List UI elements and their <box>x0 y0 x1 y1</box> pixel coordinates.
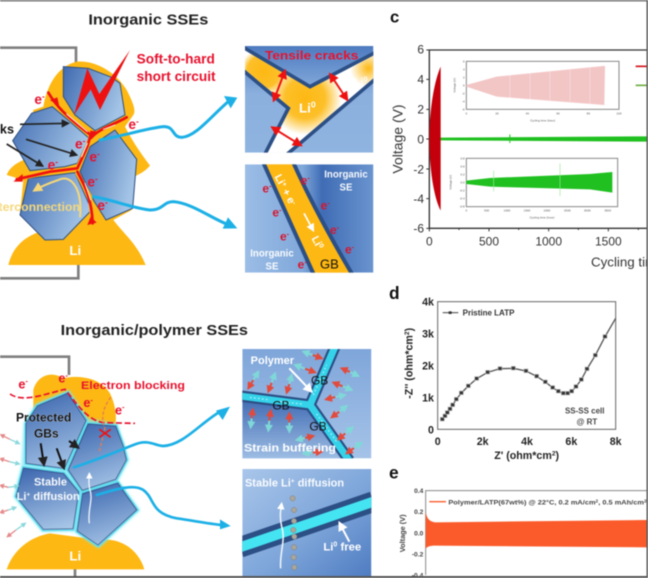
electrons: e <box>262 181 269 195</box>
reaction label: - <box>290 201 297 206</box>
y axis title: 2 <box>404 331 411 335</box>
label: soft-to-hard short circuit: short circuit <box>137 69 216 84</box>
right frame strip <box>646 0 648 578</box>
inset: green trace: 0 <box>465 209 467 213</box>
Li ion dots <box>290 496 297 570</box>
reaction label: + e <box>278 184 297 206</box>
legend: Pristine LATP <box>463 308 515 317</box>
heading: Inorganic/polymer SSEs: Inorganic/polymer SSEs <box>61 323 248 339</box>
inset: red trace: 6 <box>463 59 465 63</box>
inset: green trace: 0.2 <box>461 172 465 176</box>
GB labels <box>272 374 328 434</box>
strain arrows <box>248 355 354 453</box>
inset: green trace: 2500 <box>564 209 571 213</box>
electron labels: e <box>34 92 42 107</box>
electrons: - <box>304 257 307 266</box>
interconnection arrow <box>34 179 80 217</box>
y axis title: ) <box>404 327 416 331</box>
inset: green trace: 3000 <box>584 209 591 213</box>
tensile double arrows <box>272 71 347 145</box>
label: soft-to-hard short circuit: Soft-to-hard <box>137 51 215 66</box>
electron labels: - <box>83 135 86 145</box>
electrons: - <box>122 403 125 412</box>
x tick labels: 0 <box>426 234 433 248</box>
reaction label: + <box>280 181 288 188</box>
Li0 free pointer <box>339 523 349 542</box>
electron labels: - <box>42 91 45 101</box>
x tick labels: 1500 <box>595 234 622 248</box>
axes frame <box>426 491 648 575</box>
y tick labels: -0.2 <box>412 552 424 559</box>
y tick labels: 4 <box>417 73 424 87</box>
label: Li0 product: 0 <box>317 243 325 250</box>
x tick labels: 4k <box>521 436 533 448</box>
electrons <box>18 371 125 417</box>
y axis title: -Z'' (ohm*cm <box>404 335 416 399</box>
inset: green trace: -0.2 <box>460 188 465 192</box>
inset: red trace: -6 <box>462 107 465 111</box>
inset: green trace: 1000 <box>504 209 511 213</box>
inset: green trace: -0.4 <box>460 196 465 200</box>
inset: red trace: 100 <box>617 112 622 116</box>
label: Stable Li+ diffusion: Li <box>17 491 26 503</box>
inset: red trace <box>453 59 622 123</box>
bottom frame strip <box>0 576 648 578</box>
zoom panel: stable Li+ diffusion <box>240 469 373 576</box>
label: Li: Li <box>69 549 81 564</box>
electrons: e <box>321 198 327 212</box>
electrons: e <box>83 396 90 410</box>
electrons: e <box>58 372 65 386</box>
inset: red trace: 0 <box>463 83 465 87</box>
annotation: SS-SS cell @ RT: SS-SS cell <box>565 406 604 415</box>
x tick labels: 1000 <box>535 234 562 248</box>
protected grains <box>15 392 138 547</box>
ceramic grains <box>13 67 137 240</box>
y tick labels: 1k <box>422 392 434 404</box>
label: Stable Li+ diffusion: diffusion <box>30 491 80 503</box>
electron labels: e <box>89 150 97 165</box>
electrons: - <box>279 206 282 215</box>
electron labels: e <box>75 136 83 151</box>
electron labels: - <box>55 156 58 166</box>
cracks with electron paths <box>17 93 127 223</box>
inset: green trace: Voltage (V) <box>449 175 453 190</box>
electrons: - <box>25 377 28 386</box>
x tick labels: 6k <box>565 436 577 448</box>
blue zoom arrow upper <box>74 412 220 467</box>
x tick labels: 8k <box>610 436 622 448</box>
black arrows to cracks <box>7 123 77 166</box>
upper arrowhead <box>224 96 237 108</box>
y tick labels: 0 <box>417 132 424 146</box>
zoom panel: GB electron conduction <box>245 163 373 275</box>
inset: green trace: 3500 <box>604 209 611 213</box>
upper arrowhead <box>216 407 230 420</box>
legend: 2 <box>596 498 599 503</box>
chart e: polymer/LATP voltage profile <box>389 462 648 578</box>
y tick labels <box>422 296 434 436</box>
y axis title: Voltage (V) <box>398 514 407 552</box>
inset: red trace: 20 <box>495 112 499 116</box>
green trace <box>440 134 648 143</box>
inset: red trace: 4 <box>463 67 465 71</box>
electron labels: - <box>105 197 108 207</box>
label: Inorganic SE left: Inorganic <box>250 249 294 260</box>
legend <box>429 498 647 507</box>
red trace <box>429 67 441 211</box>
label: GB: GB <box>320 257 339 272</box>
heading: Inorganic SSEs: Inorganic SSEs <box>88 12 208 28</box>
inset: red trace: -2 <box>462 91 465 95</box>
label: Stable Li+ diffusion: + <box>291 478 295 485</box>
inset: green trace: 0.0 <box>461 180 465 184</box>
label: Inorganic SE right: SE <box>340 182 353 193</box>
electron labels: - <box>136 116 139 126</box>
inset: red trace: -4 <box>462 99 465 103</box>
x tick labels <box>426 234 622 248</box>
label: Inorganic SE right: Inorganic <box>324 170 368 181</box>
legend: Polymer/LATP(67wt%) @ 22°C, 0.2 mA/cm <box>448 500 581 507</box>
chart d: Nyquist impedance plot <box>389 283 622 462</box>
electron labels: e <box>97 198 105 213</box>
orange voltage band <box>426 512 648 549</box>
black arrows to GBs <box>41 441 78 468</box>
x tick labels: 500 <box>479 234 499 248</box>
electrons: e <box>280 230 287 244</box>
label: Protected GBs: GBs <box>34 427 59 441</box>
label: Li0 right: Li <box>354 77 363 89</box>
y tick labels: 3k <box>422 328 434 340</box>
panel letter d: d <box>389 283 400 303</box>
y tick labels: -6 <box>413 222 424 236</box>
electrons: - <box>352 242 355 251</box>
inset: red trace: 80 <box>587 112 590 116</box>
label: Stable Li+ diffusion: diffusion <box>295 478 344 490</box>
blue zoom arrow upper <box>100 99 232 140</box>
x axis title: Z' (ohm*cm <box>494 450 552 462</box>
circuit wire <box>0 48 78 278</box>
electrons: - <box>65 371 68 380</box>
inset: green trace: 0.8 <box>461 156 465 160</box>
panel: inorganic SSEs schematic <box>0 12 237 278</box>
inset: red trace: Voltage (V) <box>453 78 457 93</box>
polymer glow around grains <box>15 392 138 547</box>
inset: green trace: -0.8 <box>460 204 465 208</box>
inset: green trace: 2000 <box>544 209 551 213</box>
top frame line <box>0 0 648 2</box>
label: Li0 product: Li <box>309 234 324 248</box>
inset: green trace: 1500 <box>524 209 531 213</box>
inset: green trace: Cycling time (hour) <box>529 216 555 220</box>
electrons: e <box>301 174 307 188</box>
panel: inorganic/polymer SSEs schematic <box>0 323 248 578</box>
inset: red trace: Cycling time (hour) <box>530 119 555 123</box>
polymer pointer arrow <box>289 368 312 392</box>
panel letter e: e <box>389 462 399 482</box>
label: Li0 centre: 0 <box>311 100 316 110</box>
strain arrows left <box>0 435 25 537</box>
electron labels <box>34 91 139 213</box>
y tick labels: 6 <box>417 43 424 57</box>
electrons: e <box>330 223 337 237</box>
label: Stable Li+ diffusion: + <box>26 491 30 498</box>
crack arrowheads <box>13 97 99 225</box>
lithium dendrite blob <box>7 62 150 265</box>
y tick labels: 0 <box>428 424 434 436</box>
lower arrowhead <box>220 519 231 529</box>
electrons: - <box>327 198 330 207</box>
inset: green trace: 0.6 <box>461 164 465 168</box>
x tick labels: 2k <box>477 436 489 448</box>
inset: red trace: 2 <box>463 75 465 79</box>
GB labels: GB <box>311 374 328 388</box>
lithium bottom deposit <box>7 533 144 569</box>
polymer layer <box>240 502 373 547</box>
panel: strain buffering and Li diffusion zoom-ins <box>240 347 373 576</box>
zoom panel: tensile cracks <box>243 46 375 154</box>
electron labels: - <box>95 174 98 184</box>
electrons: - <box>90 395 93 404</box>
label: Li0 centre: Li <box>299 100 311 115</box>
label: Li: Li <box>69 243 81 258</box>
electrons: - <box>269 181 272 190</box>
label: Protected GBs: Protected <box>16 411 71 425</box>
y tick labels: 0.0 <box>414 531 424 538</box>
electrons: e <box>345 242 352 256</box>
x tick labels: 0 <box>435 436 441 448</box>
electron blocking dashed line <box>10 389 135 423</box>
reaction arrow <box>304 213 313 231</box>
electrons <box>262 174 355 271</box>
electrons: e <box>298 257 304 271</box>
blue zoom arrow lower <box>93 197 232 226</box>
y tick labels: 0.2 <box>414 509 424 516</box>
blue zoom arrow lower <box>97 487 222 525</box>
inset: red trace: 60 <box>556 112 560 116</box>
y tick labels: -4 <box>413 192 424 206</box>
reaction label: Li <box>272 172 287 186</box>
label: Polymer: Polymer <box>251 355 295 367</box>
blocked electron path <box>99 397 111 452</box>
legend: , 0.5 mAh/cm <box>598 500 644 507</box>
label: Stable Li+ diffusion: Stable Li <box>245 478 291 490</box>
GB labels: GB <box>272 398 290 412</box>
label: Li0 free: Li <box>323 542 333 554</box>
circuit wire <box>0 357 75 578</box>
electron labels: - <box>97 149 100 159</box>
electrons: e <box>18 377 25 391</box>
x axis title: 2 <box>552 450 556 457</box>
electron labels: e <box>87 175 95 190</box>
lower arrowhead <box>223 217 237 229</box>
electrons: e <box>115 403 122 417</box>
y tick labels <box>412 488 424 578</box>
inset: red trace: 40 <box>526 112 529 116</box>
y tick labels <box>413 43 424 236</box>
electron labels: e <box>48 157 55 172</box>
impedance curve <box>442 318 616 419</box>
label: Li0 free: 0 <box>333 542 337 549</box>
electrons: - <box>337 223 340 232</box>
legend: 2 <box>644 498 647 503</box>
label: Inorganic SE left: SE <box>266 262 279 273</box>
lithium top deposit <box>33 375 116 426</box>
annotation: SS-SS cell @ RT: @ RT <box>577 417 597 426</box>
panel letter c: c <box>390 8 399 27</box>
electrons: e <box>272 206 279 220</box>
axis ticks <box>426 50 638 231</box>
inset: green trace <box>449 156 618 220</box>
y axis title: Voltage (V) <box>389 104 405 174</box>
y tick labels: 2k <box>422 360 434 372</box>
label: Electron blocking: Electron blocking <box>81 380 185 392</box>
panel: tensile cracks and GB zoom-ins <box>243 46 375 275</box>
inset: red trace: 0 <box>465 112 467 116</box>
axes frame <box>429 50 648 228</box>
interface band <box>240 502 373 547</box>
label: Tensile cracks: Tensile cracks <box>265 49 358 62</box>
y tick labels: 0.4 <box>414 488 424 495</box>
electron labels: e <box>128 117 136 132</box>
data markers <box>440 335 607 421</box>
x tick labels <box>435 436 622 448</box>
white diffusion arrow <box>89 473 91 523</box>
zoom panel: strain buffering <box>240 347 371 461</box>
electrons: - <box>287 230 290 239</box>
label: Strain buffering: Strain buffering <box>244 443 336 455</box>
legend swatches <box>636 66 648 85</box>
chart c: voltage vs cycling time <box>389 8 648 270</box>
y tick labels: 4k <box>422 296 434 308</box>
lightning bolt <box>74 50 130 115</box>
electrons: - <box>307 174 310 183</box>
axes frame <box>438 302 616 429</box>
x axis title: ) <box>556 450 560 462</box>
y tick labels: 2 <box>417 102 424 116</box>
label: Stable Li+ diffusion: Stable <box>34 477 67 489</box>
label: Li0 free: free <box>337 542 361 554</box>
y tick labels: -2 <box>413 162 424 176</box>
grain outlines <box>16 393 137 545</box>
inset: green trace: 500 <box>484 209 489 213</box>
GB labels: GB <box>309 420 327 434</box>
white diffusion arrow <box>280 503 283 568</box>
blocked cross <box>99 429 111 437</box>
label: Li0 right: 0 <box>363 75 368 84</box>
